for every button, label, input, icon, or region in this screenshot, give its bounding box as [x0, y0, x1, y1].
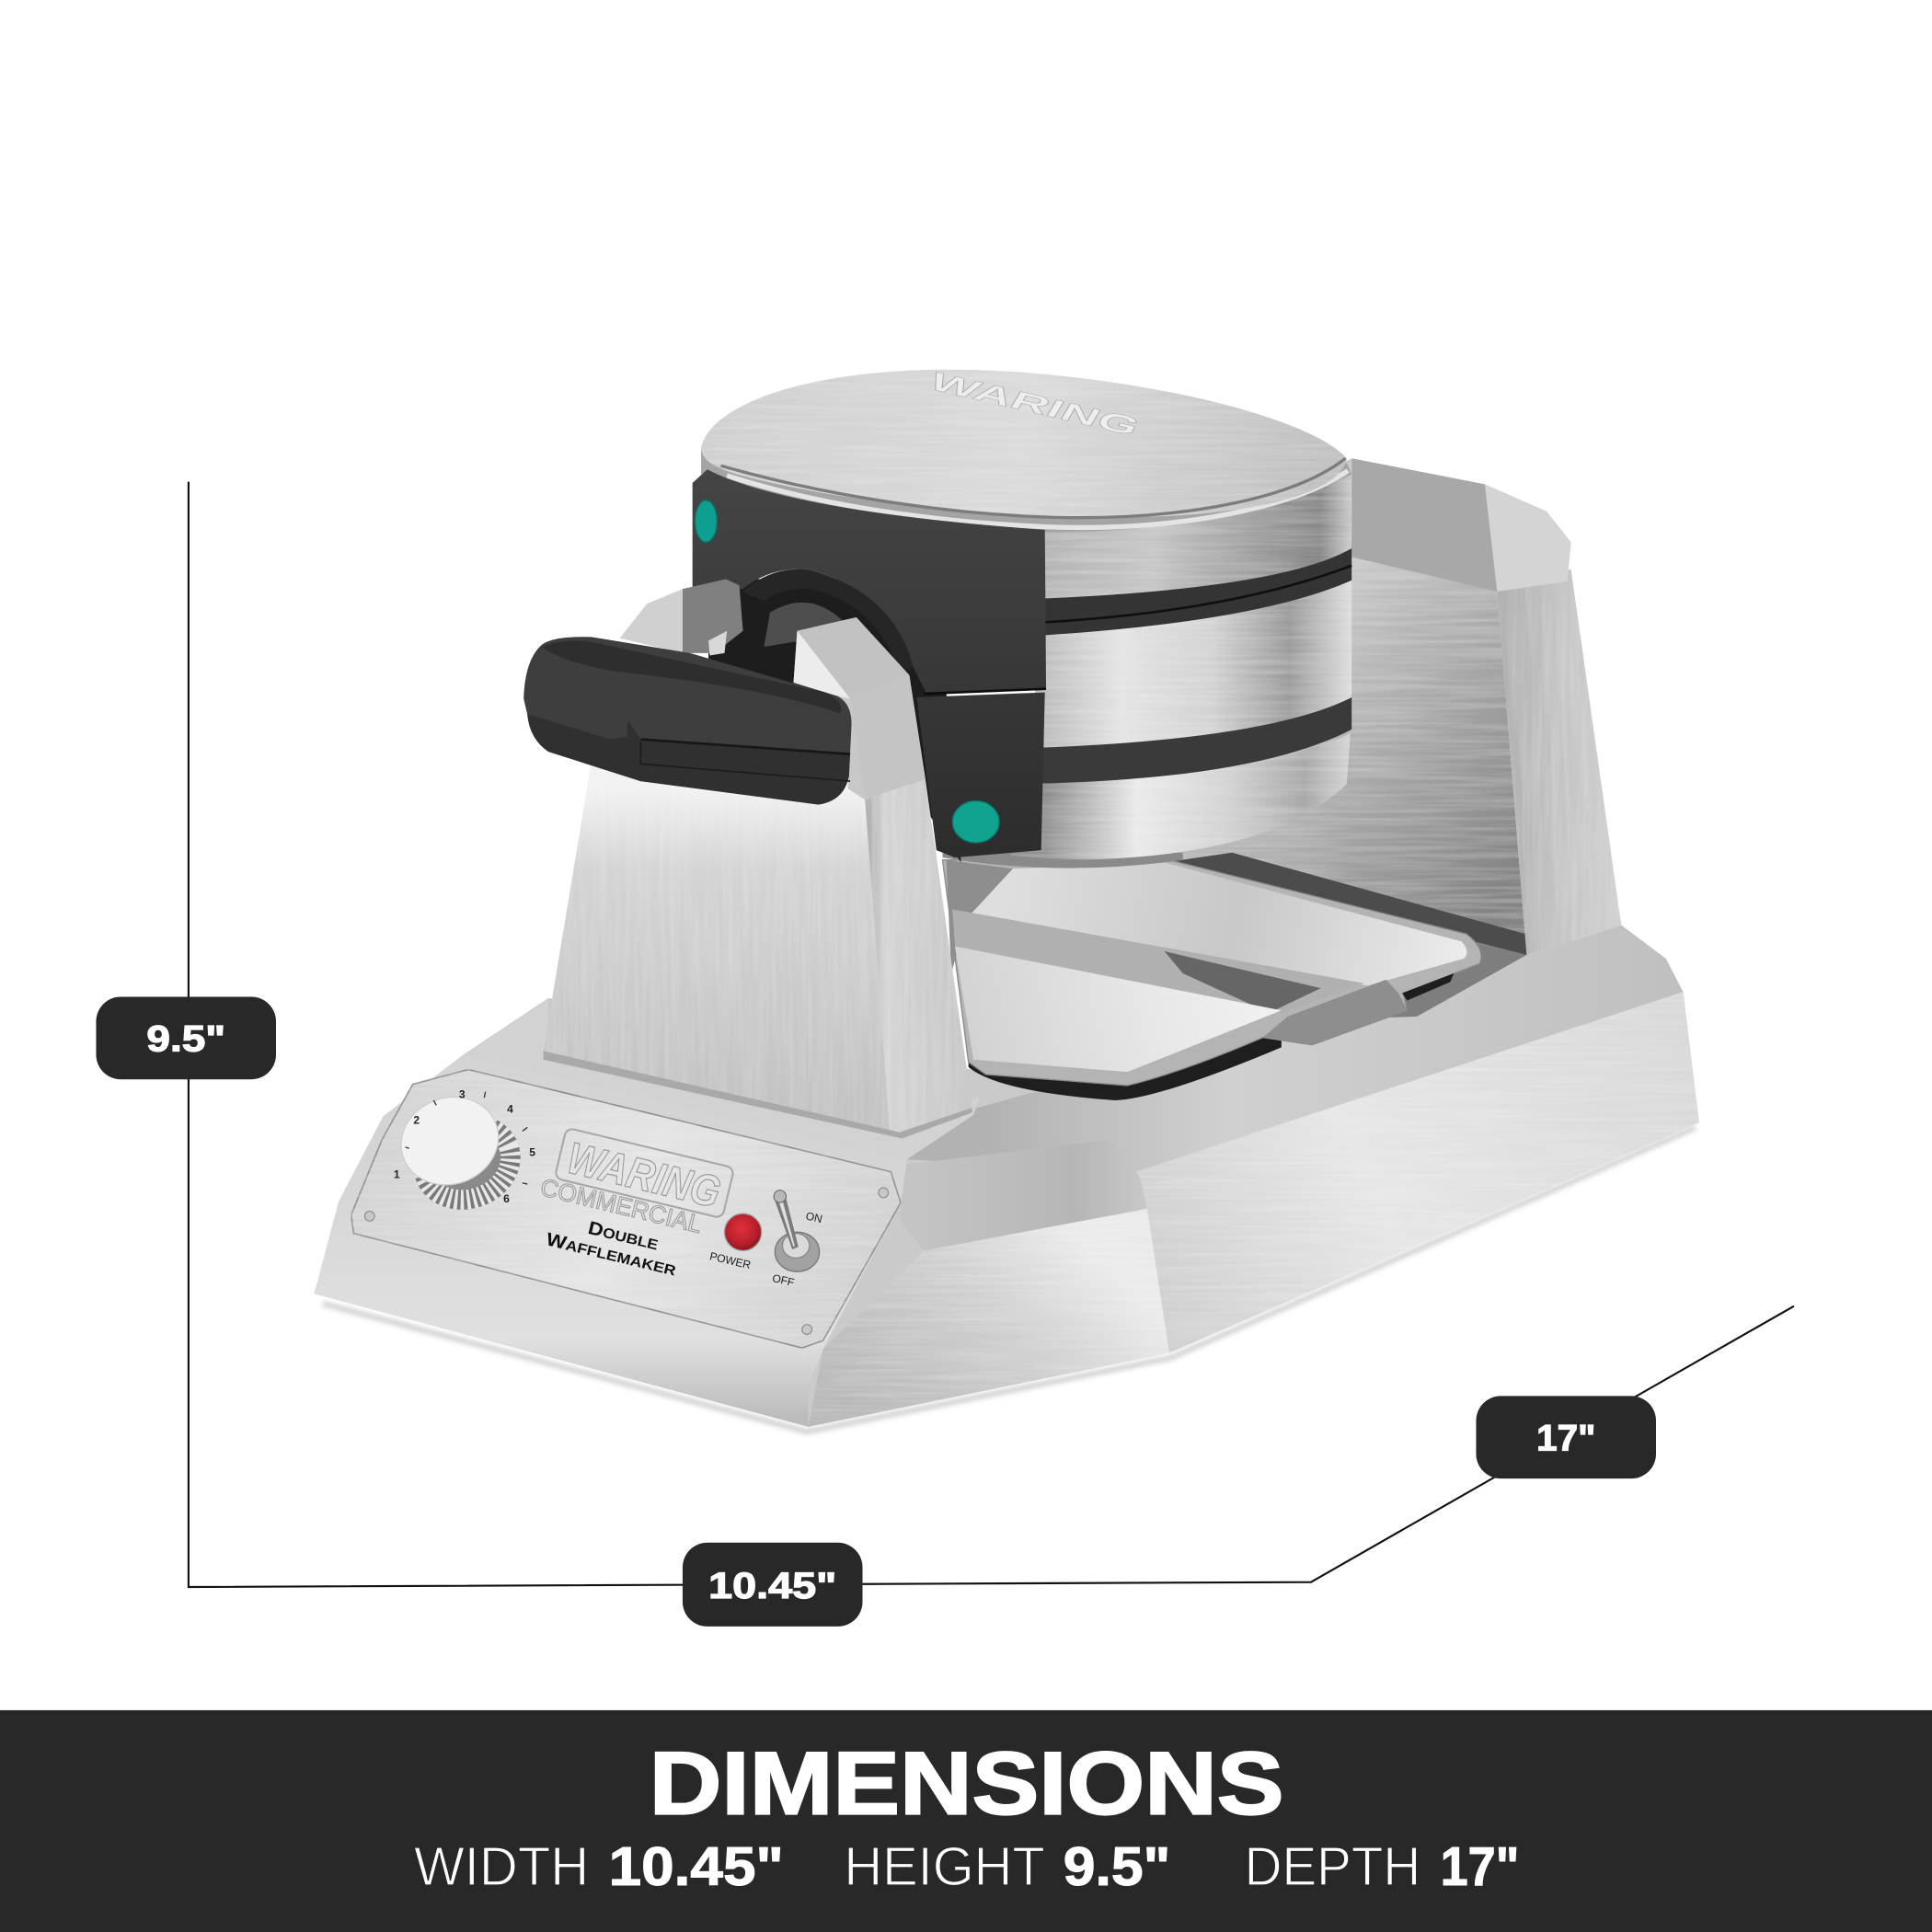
black housing [693, 469, 1046, 863]
height spec: 9.5" [1064, 1837, 1170, 1897]
control plate [351, 1069, 901, 1348]
rear arm [620, 589, 683, 653]
tray back wall [952, 863, 1467, 985]
bottom rim [943, 850, 1183, 868]
tower side face [865, 778, 972, 1133]
upper arm [793, 617, 926, 799]
dimension lines [189, 482, 1794, 1587]
width spec: 10.45" [609, 1837, 784, 1897]
deck surface and bevel [907, 926, 1683, 1172]
on label: ON [804, 1209, 823, 1225]
height callout pill: 9.5" [146, 1018, 225, 1059]
height spec [844, 1837, 1170, 1897]
corner chamfer upper [900, 1140, 1147, 1250]
model label: DOUBLE [586, 1218, 661, 1254]
teal indicator lower [952, 801, 999, 843]
dial numbers and ticks [394, 1087, 535, 1205]
back support tower [1146, 458, 1621, 955]
waffle maker product illustration [315, 368, 1699, 1432]
width spec: WIDTH [414, 1837, 589, 1897]
dial numbers and ticks: 5 [529, 1145, 535, 1158]
teal indicator upper [695, 500, 717, 542]
power light [725, 1213, 762, 1250]
panel: dimensions footer band [0, 1710, 1932, 1932]
base of appliance [315, 863, 1699, 1432]
dial numbers and ticks: 4 [507, 1102, 513, 1115]
dial numbers and ticks: 6 [503, 1192, 510, 1205]
embossed logo on lid: WARING [923, 368, 1145, 442]
width callout pill: 10.45" [708, 1565, 836, 1606]
dark band lower [1035, 694, 1351, 784]
tray inner slope [952, 909, 1364, 1013]
model label [544, 1209, 683, 1281]
power label: POWER [708, 1249, 753, 1271]
width callout pill [683, 1543, 863, 1627]
depth callout pill [1476, 1396, 1656, 1478]
depth spec [1245, 1837, 1519, 1897]
lid rim [701, 449, 1351, 533]
height callout pill [96, 996, 276, 1079]
middle plate [1035, 579, 1351, 748]
front support tower [544, 579, 972, 1139]
tower front face [544, 762, 890, 1130]
depth spec: 17" [1441, 1837, 1519, 1897]
handle [523, 637, 852, 805]
embossed brand logo [538, 1125, 734, 1243]
drip tray [943, 858, 1481, 1100]
embossed brand logo: WARING [562, 1133, 725, 1218]
waffle cylinder [701, 368, 1351, 868]
plate screws [364, 1100, 889, 1334]
front apron [315, 1054, 907, 1427]
right side face [1136, 992, 1699, 1353]
dial numbers and ticks: 1 [394, 1167, 400, 1180]
tray rim [943, 858, 1481, 1086]
corner chamfer lower [809, 1209, 1169, 1427]
lid top [701, 370, 1347, 517]
lower plate [1010, 733, 1351, 859]
off label: OFF [771, 1271, 796, 1289]
tray handle tab [1263, 980, 1407, 1045]
depth spec: DEPTH [1245, 1837, 1420, 1897]
tray floor [955, 947, 1282, 1072]
dial numbers and ticks: 2 [413, 1113, 420, 1126]
dial numbers and ticks: 3 [459, 1087, 466, 1100]
depth callout pill: 17" [1536, 1417, 1595, 1458]
knob [388, 1084, 522, 1212]
height spec: HEIGHT [844, 1837, 1045, 1897]
toggle switch [774, 1190, 820, 1271]
shadowed recess behind tray [1165, 863, 1526, 1023]
width spec [414, 1837, 784, 1897]
heading: DIMENSIONS [650, 1734, 1284, 1833]
model label: WAFFLEMAKER [544, 1229, 678, 1281]
dark band upper [1035, 544, 1351, 636]
upper plate [702, 446, 1351, 599]
embossed brand logo: COMMERCIAL [538, 1173, 705, 1238]
